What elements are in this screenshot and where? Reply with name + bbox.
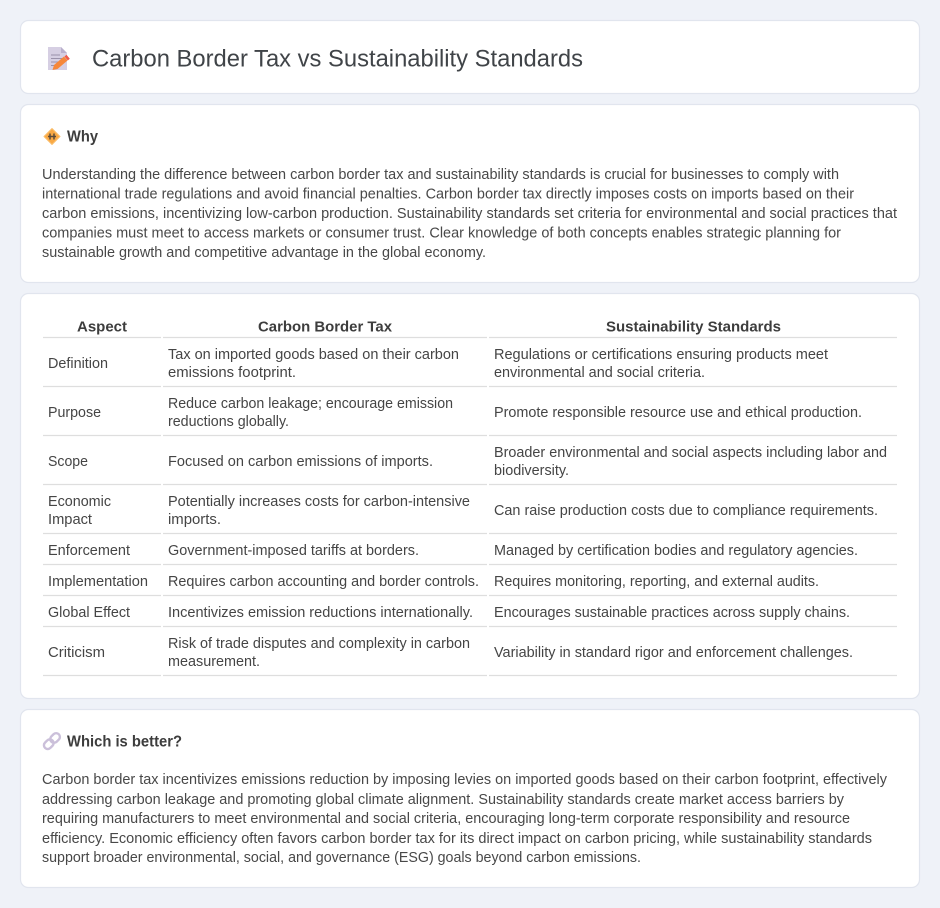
row: scope: Scope	[48, 454, 88, 470]
row: economic impact: Economic	[48, 494, 111, 510]
table header	[77, 318, 781, 336]
row: scope: biodiversity.	[494, 463, 569, 479]
row: criticism	[48, 636, 853, 670]
text block: why paragraph: international trade regulations and avoid financial penalties. Carbon border tax directly imposes costs on imports based on their	[42, 186, 854, 202]
icon: document with pencil	[48, 47, 70, 70]
row: definition	[48, 347, 828, 381]
row: economic impact	[48, 494, 878, 528]
text block: which is better paragraph	[42, 772, 888, 866]
heading: which is better: Which is better?	[67, 734, 182, 750]
text block: why paragraph: carbon emissions, incentivizing low-carbon production. Sustainability standards set criteria for environmental and social practices that	[42, 206, 897, 222]
row: purpose: reductions globally.	[168, 414, 289, 430]
row: implementation	[48, 574, 819, 590]
row: global effect: Global Effect	[48, 605, 130, 621]
panel: comparison table	[20, 294, 920, 698]
text block: which is better paragraph: addressing carbon leakage and promoting global climate alignment. Sustainability standards create market access barriers by	[42, 792, 845, 808]
text block: which is better paragraph: support broader environmental, social, and governance (ESG) goals beyond carbon emissions.	[42, 850, 641, 866]
row: economic impact: Impact	[48, 512, 92, 528]
text block: why paragraph	[42, 167, 897, 261]
row: enforcement	[48, 543, 858, 559]
panel: which is better	[20, 710, 920, 888]
row: economic impact: Can raise production costs due to compliance requirements.	[494, 503, 878, 519]
row: criticism: measurement.	[168, 654, 260, 670]
row: purpose: Reduce carbon leakage; encourage emission	[168, 396, 453, 412]
row: purpose: Promote responsible resource use and ethical production.	[494, 405, 862, 421]
title: Carbon Border Tax vs Sustainability Standards	[92, 46, 583, 72]
row: enforcement: Managed by certification bodies and regulatory agencies.	[494, 543, 858, 559]
row: economic impact: Potentially increases costs for carbon-intensive	[168, 494, 470, 510]
row: definition: Regulations or certifications ensuring products meet	[494, 347, 828, 363]
row: implementation: Implementation	[48, 574, 148, 590]
text block: why paragraph: companies must meet to access markets or consumer trust. Clear knowledge of both concepts enables strategic planning for	[42, 226, 841, 242]
row: purpose: Purpose	[48, 405, 101, 421]
row: criticism: Risk of trade disputes and complexity in carbon	[168, 636, 470, 652]
icon: warning diamond	[44, 128, 60, 144]
row: definition: emissions footprint.	[168, 365, 296, 381]
heading: why: Why	[67, 128, 98, 146]
row: global effect	[48, 605, 850, 621]
text block: which is better paragraph: efficiency. Economic efficiency often favors carbon border tax for its direct impact on carbon pricing, while sustainability standards	[42, 831, 872, 847]
row: purpose	[48, 396, 862, 430]
row: enforcement: Enforcement	[48, 543, 130, 559]
text block: why paragraph: Understanding the difference between carbon border tax and sustainability standards is crucial for businesses to comply with	[42, 167, 839, 183]
row: enforcement: Government-imposed tariffs at borders.	[168, 543, 419, 559]
row: global effect: Incentivizes emission reductions internationally.	[168, 605, 473, 621]
row: global effect: Encourages sustainable practices across supply chains.	[494, 605, 850, 621]
row: implementation: Requires monitoring, reporting, and external audits.	[494, 574, 819, 590]
row: definition: environmental and social criteria.	[494, 365, 705, 381]
row: scope	[48, 445, 887, 479]
text block: why paragraph: sustainable growth and competitive advantage in the global economy.	[42, 245, 486, 261]
row: definition: Definition	[48, 356, 108, 372]
row: criticism: Criticism	[48, 645, 105, 661]
row: scope: Focused on carbon emissions of imports.	[168, 454, 433, 470]
text block: which is better paragraph: requiring manufacturers to meet environmental and social criteria, encouraging long-term corporate responsibility and resource	[42, 811, 850, 827]
panel: title header	[20, 20, 920, 94]
row: scope: Broader environmental and social aspects including labor and	[494, 445, 887, 461]
row: definition: Tax on imported goods based on their carbon	[168, 347, 459, 363]
table header: Aspect	[77, 318, 127, 336]
table header: Sustainability Standards	[606, 318, 781, 336]
text block: which is better paragraph: Carbon border tax incentivizes emissions reduction by imposing levies on imported goods based on their carbon footprint, effectively	[42, 772, 888, 788]
row: criticism: Variability in standard rigor and enforcement challenges.	[494, 645, 853, 661]
row: implementation: Requires carbon accounting and border controls.	[168, 574, 479, 590]
row: economic impact: imports.	[168, 512, 221, 528]
icon: chain link	[42, 732, 61, 751]
panel: why	[20, 104, 920, 282]
table header: Carbon Border Tax	[258, 318, 393, 336]
